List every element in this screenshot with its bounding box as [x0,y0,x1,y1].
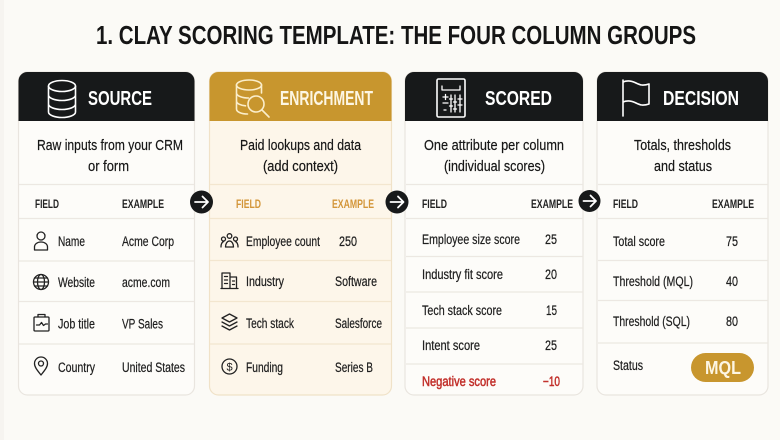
source description: or form [88,158,129,175]
icon: calculator [437,79,465,117]
arrow: source to enrichment [190,190,213,214]
row: intent score [422,338,557,353]
scored description [424,137,564,175]
row: intent score: 25 [545,338,557,353]
row: threshold MQL: Threshold (MQL) [613,274,693,289]
row: funding: Funding [246,360,283,375]
row: funding [222,359,373,375]
panel: decision [597,72,768,395]
row: total score: 75 [726,234,738,249]
decision table header: FIELD [613,199,638,211]
decision header [597,72,768,121]
row: status [613,353,754,382]
icon: flag [623,80,649,116]
row: name [34,232,174,250]
scored table header: EXAMPLE [531,199,573,211]
icon: database [48,80,76,118]
enrichment header: ENRICHMENT [280,88,373,110]
source header: SOURCE [88,88,152,110]
arrow: enrichment to scored [386,190,408,214]
row: industry: Software [335,274,377,289]
arrow: scored to decision [578,190,600,212]
row: employee count: Employee count [246,234,320,249]
source header [18,72,194,121]
decision table header [613,199,754,211]
status badge: MQL [691,353,754,382]
row: threshold SQL: Threshold (SQL) [613,314,690,329]
scored description: One attribute per column [424,137,564,154]
enrichment description [240,137,362,175]
scored table header: FIELD [422,199,447,211]
row: name: Acme Corp [122,234,174,249]
decision table header: EXAMPLE [712,199,754,211]
decision header: DECISION [663,88,739,110]
panel: source [18,72,194,395]
row: employee count: 250 [339,234,357,249]
source description: Raw inputs from your CRM [37,137,183,154]
row: tech stack score: 15 [546,303,557,318]
row: employee size score: 25 [545,232,557,247]
row: negative score: Negative score [422,374,496,389]
icon: database search [236,80,269,117]
row: intent score: Intent score [422,338,480,353]
row: threshold MQL: 40 [726,274,738,289]
source table header: EXAMPLE [122,199,164,211]
status badge: MQL: MQL [705,358,741,378]
enrichment table header: FIELD [236,199,261,211]
row: website: Website [58,275,95,290]
enrichment description: Paid lookups and data [240,137,362,154]
panel: enrichment [210,72,392,395]
row: employee size score: Employee size score [422,232,520,247]
row: name: Name [58,234,85,249]
source description [37,137,183,175]
scored header: SCORED [485,88,552,110]
scored header [405,72,583,121]
row: website [34,274,170,290]
row: funding: $ [226,362,233,374]
enrichment header [210,72,392,121]
row: country [34,357,185,375]
scored table header [422,199,573,211]
row: negative score: −10 [543,374,560,389]
enrichment table header: EXAMPLE [332,199,374,211]
decision description: Totals, thresholds [634,137,731,154]
row: job title [34,314,163,332]
row: negative score [422,374,560,389]
row: tech stack [222,314,382,331]
row: industry fit score: 20 [545,267,557,282]
row: tech stack: Salesforce [335,316,382,331]
row: status: Status [613,358,643,373]
row: tech stack: Tech stack [246,316,294,331]
panel: scored [405,72,583,395]
row: threshold SQL: 80 [726,314,738,329]
row: industry fit score: Industry fit score [422,267,503,282]
decision description: and status [654,158,712,175]
enrichment table header [236,199,374,211]
source table header [35,199,164,211]
row: total score [613,234,738,249]
row: country: Country [58,360,95,375]
row: country: United States [122,360,185,375]
decision description [634,137,731,175]
scored description: (individual scores) [444,158,545,175]
source table header: FIELD [35,199,59,211]
row: job title: VP Sales [122,316,163,332]
row: job title: Job title [58,316,95,332]
enrichment description: (add context) [263,158,338,175]
row: tech stack score: Tech stack score [422,303,502,318]
row: total score: Total score [613,234,665,249]
row: funding: Series B [335,360,373,375]
row: website: acme.com [122,275,170,290]
row: industry: Industry [246,274,284,289]
row: employee count [221,234,357,249]
row: industry [221,273,377,289]
